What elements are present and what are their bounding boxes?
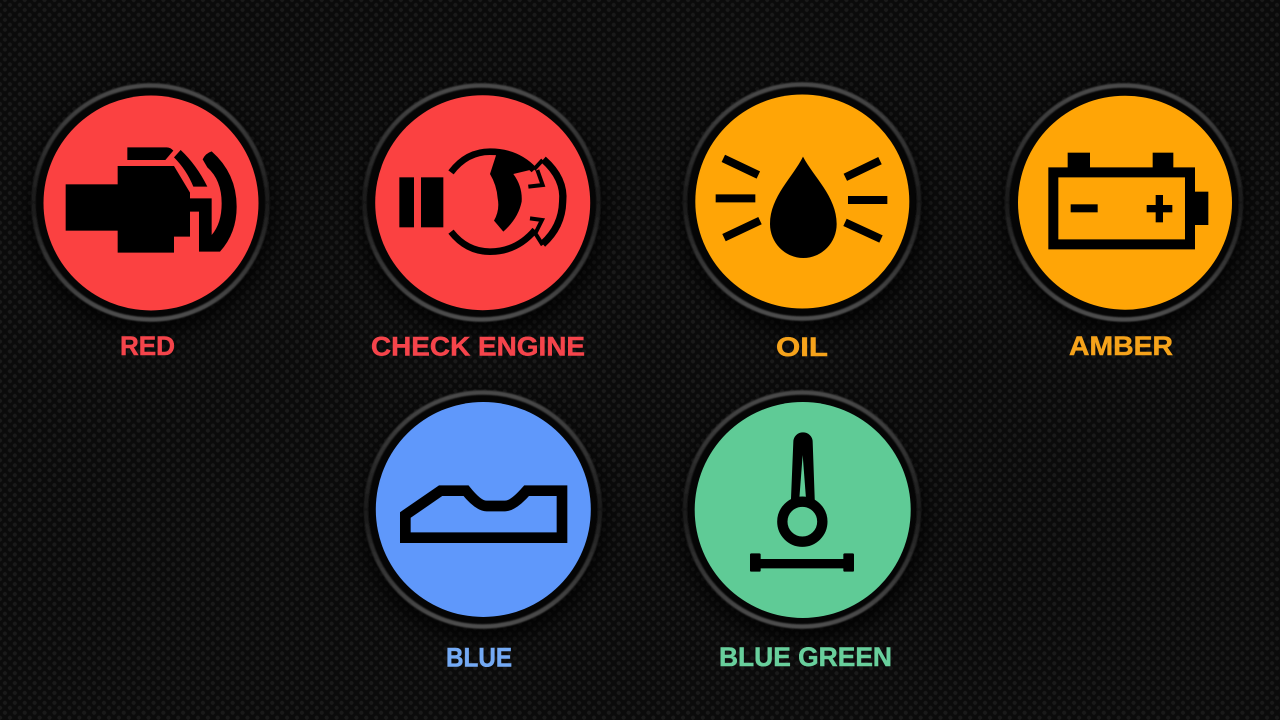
label: BLUE: BLUE	[446, 642, 512, 672]
icon: battery	[1048, 153, 1208, 249]
icon: engine	[66, 147, 237, 253]
icon: check engine	[399, 152, 563, 252]
badge: amber battery light	[1003, 84, 1247, 361]
amber disc	[695, 94, 909, 308]
red disc	[375, 95, 590, 310]
red disc	[44, 96, 258, 310]
badge: red engine light	[29, 84, 273, 361]
icon: thermometer	[750, 432, 854, 572]
label: OIL: OIL	[776, 332, 828, 362]
badge: amber oil light	[681, 82, 925, 362]
badge: red check engine light	[361, 84, 605, 362]
badge: blue light	[362, 390, 606, 672]
label: BLUE GREEN: BLUE GREEN	[719, 642, 892, 672]
blue disc	[376, 402, 591, 617]
icon: oil drop	[716, 157, 887, 258]
icon: blue outline shape	[405, 491, 562, 538]
amber disc	[1018, 96, 1232, 310]
green disc	[695, 402, 911, 618]
badge: green light	[681, 390, 925, 672]
label: CHECK ENGINE: CHECK ENGINE	[371, 332, 585, 362]
label: RED: RED	[120, 331, 175, 361]
label: AMBER: AMBER	[1069, 331, 1173, 361]
